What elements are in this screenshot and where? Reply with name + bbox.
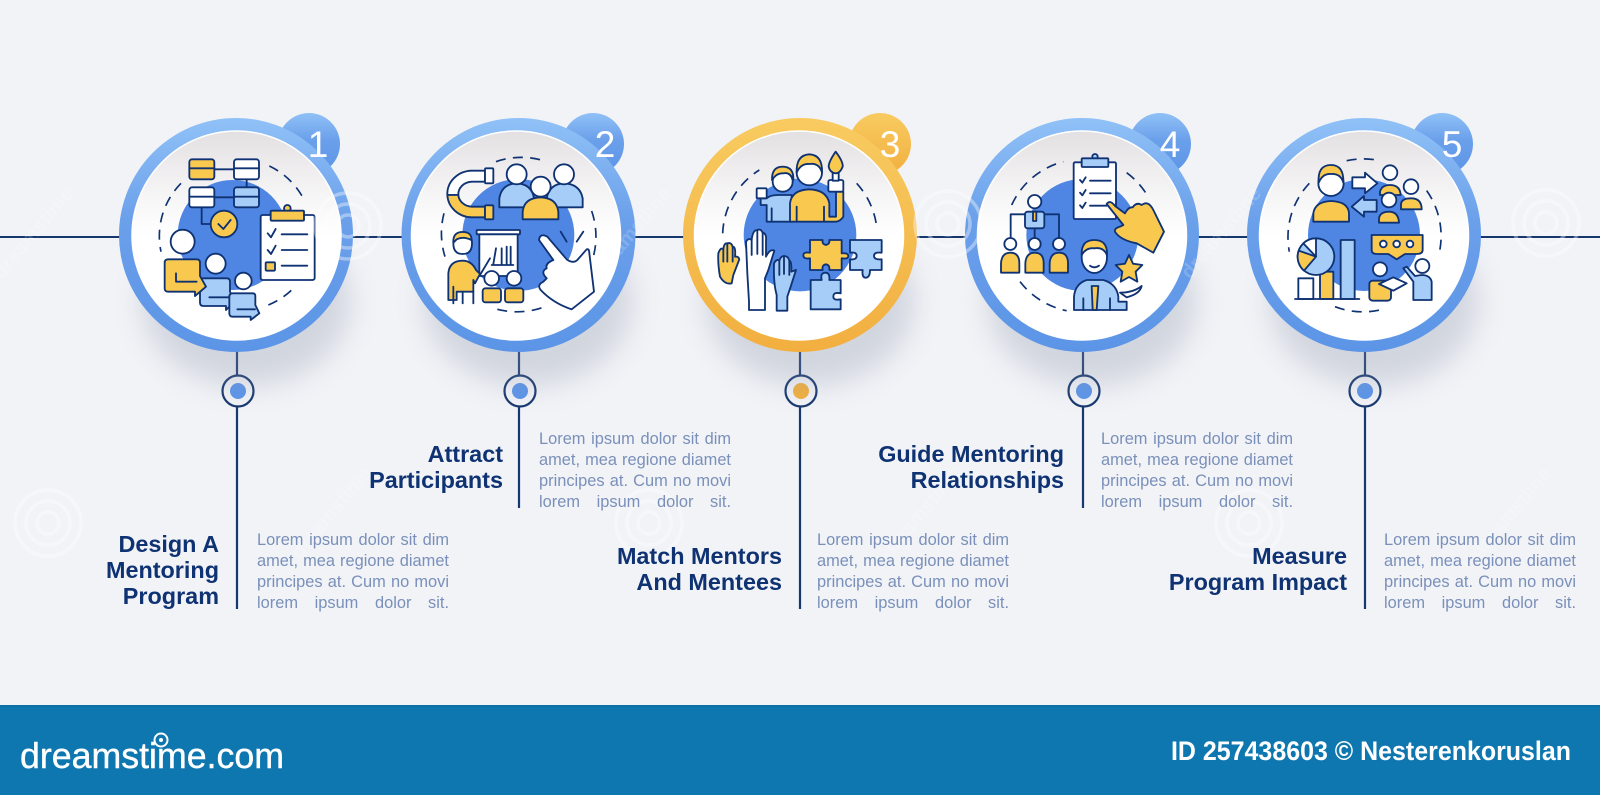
number 4: 4	[1160, 124, 1180, 165]
step 3 vertical connector	[786, 350, 816, 609]
circle 1	[119, 113, 353, 386]
body text: step 2: lorem ipsum dolor sit.	[539, 493, 731, 511]
body text: step 5: lorem ipsum dolor sit.	[1384, 594, 1576, 612]
step 2 vertical connector	[504, 350, 536, 508]
icon: attract participants	[441, 157, 596, 312]
heading: step 5: Program Impact	[1169, 569, 1347, 595]
icon: measure program impact	[1288, 159, 1441, 312]
heading: step 5: Measure	[1252, 543, 1347, 569]
icon: match mentors and mentees	[718, 152, 882, 311]
number 2: 2	[595, 124, 615, 165]
number 3: 3	[880, 124, 900, 165]
watermark spirals and diagonal text: dreamstime	[1467, 463, 1556, 563]
step 5 vertical connector	[1350, 350, 1380, 609]
heading: step 2: Attract	[428, 441, 503, 467]
heading: step 1: Design A	[118, 531, 219, 557]
body text: step 5: Lorem ipsum dolor sit dim	[1384, 531, 1576, 549]
body text: step 4: Lorem ipsum dolor sit dim	[1101, 430, 1293, 448]
footer logo: dreamstime.com	[20, 735, 284, 776]
body text: step 5: principes at. Cum no movi	[1384, 573, 1576, 591]
body text: step 5: amet, mea regione diamet	[1384, 552, 1576, 570]
footer image id: ID 257438603 © Nesterenkoruslan	[1171, 736, 1571, 766]
number 5: 5	[1442, 124, 1462, 165]
heading: step 1: Mentoring	[106, 557, 219, 583]
circle 5	[1247, 113, 1481, 386]
body text: step 3: principes at. Cum no movi	[817, 573, 1009, 591]
body text: step 3: amet, mea regione diamet	[817, 552, 1009, 570]
body text: step 4	[1101, 430, 1293, 511]
step 1 vertical connector	[222, 350, 254, 609]
icon: guide mentoring relationships	[1001, 154, 1164, 311]
body text: step 4: amet, mea regione diamet	[1101, 451, 1293, 469]
horizontal timeline line	[0, 236, 1600, 238]
heading: step 4: Guide Mentoring	[878, 441, 1064, 467]
body text: step 1	[257, 531, 449, 612]
body text: step 1: lorem ipsum dolor sit.	[257, 594, 449, 612]
watermark spirals and diagonal text	[0, 183, 1579, 563]
circle 2	[402, 113, 636, 386]
watermark spirals and diagonal text: dreamstime	[1177, 183, 1266, 283]
number 1: 1	[308, 124, 328, 165]
body text: step 1: Lorem ipsum dolor sit dim	[257, 531, 449, 549]
heading: step 3: Match Mentors	[617, 543, 782, 569]
body text: step 2: Lorem ipsum dolor sit dim	[539, 430, 731, 448]
heading: step 4: Relationships	[911, 467, 1064, 493]
heading: step 3: And Mentees	[636, 569, 782, 595]
body text: step 1: amet, mea regione diamet	[257, 552, 449, 570]
body text: step 3	[817, 531, 1009, 612]
watermark spirals and diagonal text: dreamstime	[287, 463, 376, 563]
body text: step 4: lorem ipsum dolor sit.	[1101, 493, 1293, 511]
heading: step 2: Participants	[369, 467, 503, 493]
heading: step 1: Program	[123, 583, 219, 609]
watermark spirals and diagonal text: dreamstime	[877, 463, 966, 563]
icon: planning flowchart and mentors	[159, 159, 315, 320]
footer band	[0, 705, 1600, 795]
body text: step 3: lorem ipsum dolor sit.	[817, 594, 1009, 612]
body text: step 2: amet, mea regione diamet	[539, 451, 731, 469]
body text: step 5	[1384, 531, 1576, 612]
body text: step 2	[539, 430, 731, 511]
body text: step 4: principes at. Cum no movi	[1101, 472, 1293, 490]
body text: step 2: principes at. Cum no movi	[539, 472, 731, 490]
circle 4	[965, 113, 1199, 386]
circle 3	[683, 113, 917, 386]
step 4 vertical connector	[1068, 350, 1100, 508]
body text: step 1: principes at. Cum no movi	[257, 573, 449, 591]
body text: step 3: Lorem ipsum dolor sit dim	[817, 531, 1009, 549]
watermark spirals and diagonal text: dreamstime	[587, 183, 676, 283]
